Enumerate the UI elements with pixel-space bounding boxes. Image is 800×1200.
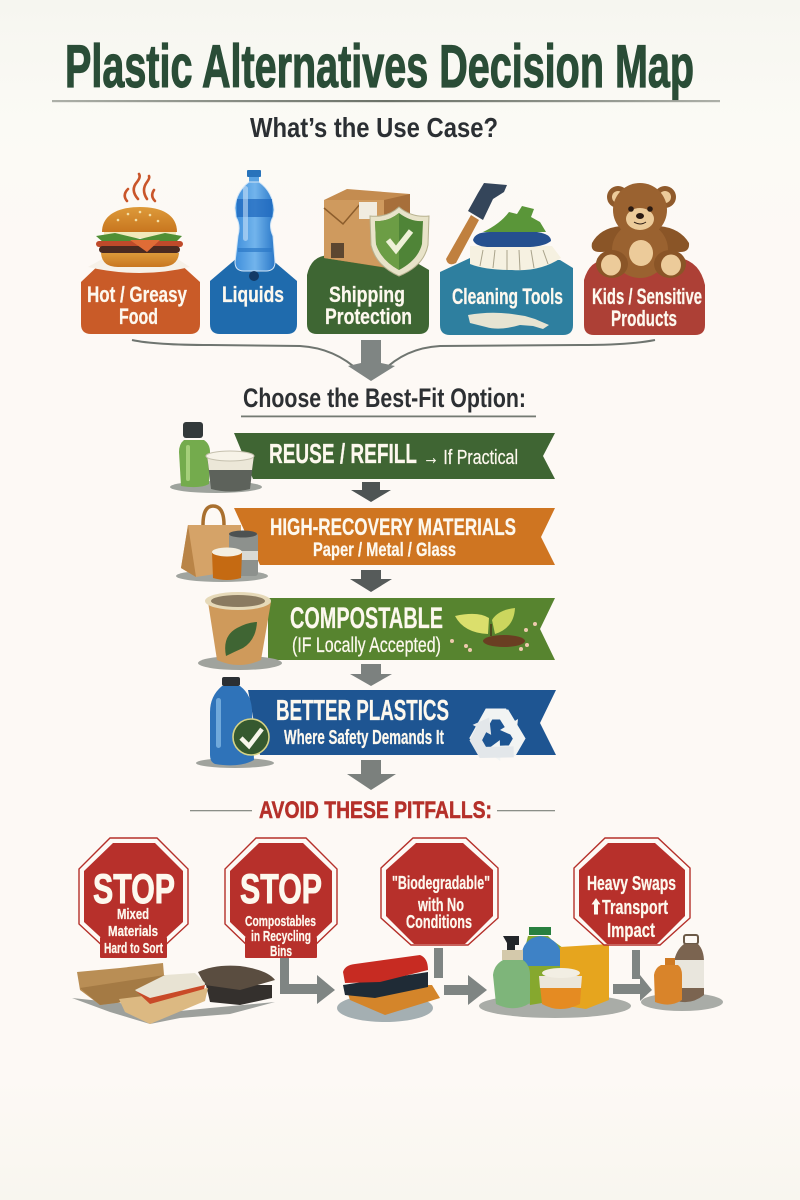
- option: compostable: COMPOSTABLE: [290, 602, 443, 635]
- card: hot greasy food: [81, 174, 200, 334]
- icon: green bottle and bowl: [170, 422, 262, 493]
- arrow: connector merging use cases: [132, 340, 655, 381]
- arrow: post and arrow to bottles: [434, 948, 487, 1005]
- pitfall: biodegradable with no conditions: with No: [417, 895, 464, 915]
- pitfall: mixed materials: STOP: [93, 865, 175, 912]
- panel: option ladder: [170, 422, 556, 768]
- pitfall: biodegradable with no conditions: [381, 838, 631, 1018]
- label: hot greasy food: Hot / Greasy: [87, 282, 188, 307]
- card: shipping protection: [307, 189, 429, 334]
- pitfall: compostables in recycling bins: in Recycling: [251, 928, 311, 945]
- label: kids sensitive products: Kids / Sensitive: [592, 284, 702, 309]
- pitfall: compostables in recycling bins: Compostables: [245, 913, 316, 930]
- label: shipping protection: Protection: [325, 304, 412, 329]
- icon: bottles and jars group: [479, 927, 631, 1018]
- pitfall: mixed materials: Mixed: [117, 906, 149, 923]
- option: compostable: [198, 592, 555, 670]
- option: high-recovery materials: HIGH-RECOVERY MATERIALS: [270, 514, 516, 541]
- option: better plastics: [196, 677, 556, 768]
- icon: steam: [125, 174, 155, 201]
- subheading: use case: What’s the Use Case?: [250, 112, 498, 143]
- panel: pitfalls: [72, 838, 723, 1024]
- arrow: to pitfalls: [347, 760, 396, 790]
- icon: brush handle: [446, 183, 507, 264]
- title rule: [52, 100, 720, 102]
- pitfall: mixed materials: Materials: [108, 923, 158, 940]
- card: kids sensitive products: [584, 183, 705, 335]
- option: better plastics: BETTER PLASTICS: [276, 695, 449, 727]
- card: cleaning tools: [440, 183, 573, 335]
- option: better plastics: Where Safety Demands It: [284, 727, 444, 749]
- card: liquids: [210, 170, 297, 334]
- label: kids sensitive products: Products: [611, 306, 677, 331]
- arrow: elbow to brush: [280, 958, 335, 1004]
- icon: teddy bear: [592, 183, 689, 278]
- pitfall: biodegradable with no conditions: "Biodegradable": [392, 873, 490, 893]
- label: hot greasy food: [87, 282, 188, 329]
- option: reuse refill: → If Practical: [423, 447, 518, 469]
- pitfall: mixed materials: [72, 838, 275, 1024]
- label: shipping protection: Shipping: [329, 282, 405, 307]
- icon: water bottle: [235, 170, 275, 281]
- arrow: post and arrow to heavy containers: [613, 950, 652, 1001]
- icon: recycling symbol: [468, 712, 527, 765]
- arrow: reuse to high-recovery: [351, 482, 391, 502]
- icon: small brush: [468, 313, 549, 329]
- pitfall: biodegradable with no conditions: Conditions: [406, 912, 472, 932]
- icon: mixed packaging pile: [72, 963, 275, 1024]
- panel: use case cards: [81, 170, 705, 335]
- heading: choose the best-fit option: Choose the Best-Fit Option:: [243, 383, 526, 413]
- pitfall: compostables in recycling bins: [225, 838, 440, 1022]
- label: hot greasy food: Food: [119, 304, 158, 329]
- icon: paper bag and jars: [176, 506, 268, 582]
- pitfall: compostables in recycling bins: Bins: [270, 943, 292, 960]
- arrow: high-recovery to compostable: [350, 570, 392, 592]
- icon: shield with check: [370, 207, 429, 276]
- pitfall: mixed materials: Hard to Sort: [104, 940, 163, 957]
- option: high-recovery materials: Paper / Metal / Glass: [313, 540, 456, 561]
- icon: scrub brush: [470, 232, 561, 270]
- heading: avoid these pitfalls: AVOID THESE PITFALLS:: [259, 797, 492, 824]
- pitfall: heavy swaps transport impact: Impact: [607, 920, 655, 942]
- pitfall: heavy swaps transport impact: [574, 838, 723, 1011]
- label: cleaning tools: Cleaning Tools: [452, 284, 563, 309]
- label: shipping protection: [325, 282, 412, 329]
- icon: sprout and soil: [450, 608, 537, 652]
- option: compostable: (IF Locally Accepted): [292, 634, 441, 657]
- icon: blue bottle with check badge: [196, 677, 274, 768]
- pitfall: heavy swaps transport impact: ⬆Transport: [590, 897, 668, 919]
- option: reuse refill: [170, 422, 555, 493]
- pitfall: compostables in recycling bins: STOP: [240, 865, 322, 912]
- label: kids sensitive products: [592, 284, 702, 331]
- icon: burger: [96, 207, 183, 267]
- icon: heavy containers: [641, 935, 723, 1011]
- icon: green foam: [483, 206, 546, 232]
- icon: compost cup with leaf: [198, 592, 282, 670]
- option: high-recovery materials: [176, 506, 555, 582]
- option: reuse refill: REUSE / REFILL: [269, 438, 417, 469]
- arrow: compostable to better plastics: [350, 664, 392, 686]
- icon: brush on slats: [337, 955, 440, 1022]
- label: liquids: Liquids: [222, 282, 284, 307]
- icon: cardboard box: [324, 189, 410, 270]
- pitfall: heavy swaps transport impact: Heavy Swaps: [587, 873, 676, 895]
